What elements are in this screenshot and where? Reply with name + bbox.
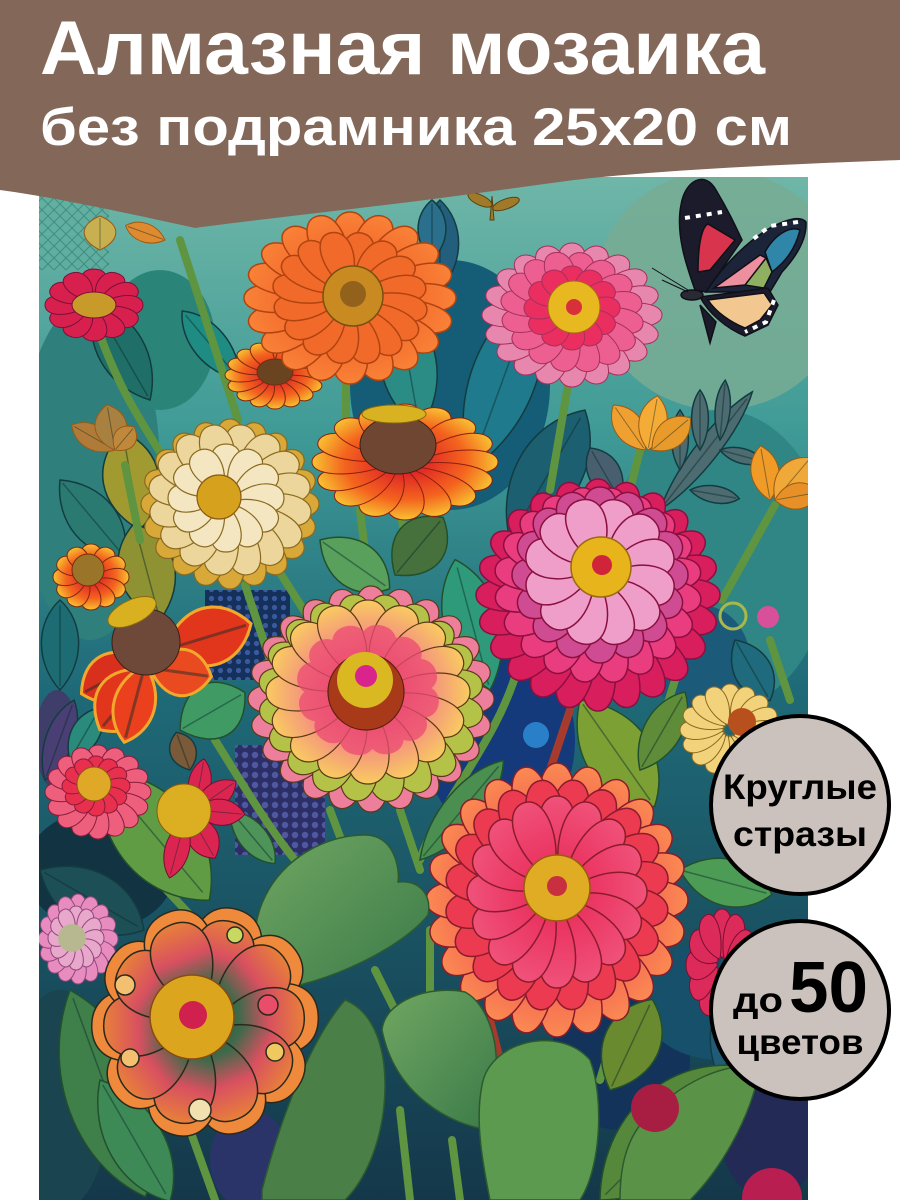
flower: red-yellow gaillardia — [312, 404, 498, 520]
title: Алмазная мозаика — [40, 6, 766, 91]
badge: up to 50 colours: до — [733, 981, 783, 1020]
painting: zinnias and butterfly — [10, 170, 845, 1200]
icon: butterfly — [652, 179, 806, 343]
badge: round rhinestones: Круглые — [723, 768, 877, 807]
flower: small orange behind big orange — [225, 341, 325, 409]
flower: cream right — [680, 684, 780, 776]
stems — [100, 240, 790, 1200]
flower: small orange left — [53, 544, 129, 610]
berries and small buds — [523, 603, 802, 1200]
badge: up to 50 colours: цветов — [736, 1023, 864, 1062]
flower: red small — [157, 757, 246, 881]
flower: big coral — [426, 762, 688, 1037]
flower: pink right — [686, 908, 752, 1016]
flower: orange tulips — [66, 216, 822, 513]
badge: up to 50 colours — [711, 921, 889, 1099]
header band — [0, 0, 900, 228]
flower: pink small left — [45, 745, 151, 839]
mid leaves — [31, 501, 778, 1200]
flower: big orange — [244, 212, 456, 384]
big green leaves — [255, 835, 760, 1200]
flower: red gaillardia left — [80, 596, 253, 744]
badge: round rhinestones — [711, 716, 889, 894]
flower: cream — [136, 411, 324, 589]
subtitle: без подрамника 25х20 см — [40, 98, 792, 157]
painting background — [10, 170, 845, 1200]
flower: pink zinnia top — [482, 240, 662, 387]
icon: dragonfly — [468, 193, 520, 220]
flower: big pink — [476, 472, 720, 711]
background foliage — [26, 200, 787, 1090]
badge: round rhinestones: стразы — [733, 815, 867, 854]
flower: multicoloured zinnia — [243, 577, 499, 819]
badge: up to 50 colours: 50 — [789, 948, 868, 1028]
flower: small magenta left — [45, 269, 143, 341]
flower: pale pink — [38, 894, 118, 984]
flower: ornamental zinnia — [91, 907, 319, 1137]
